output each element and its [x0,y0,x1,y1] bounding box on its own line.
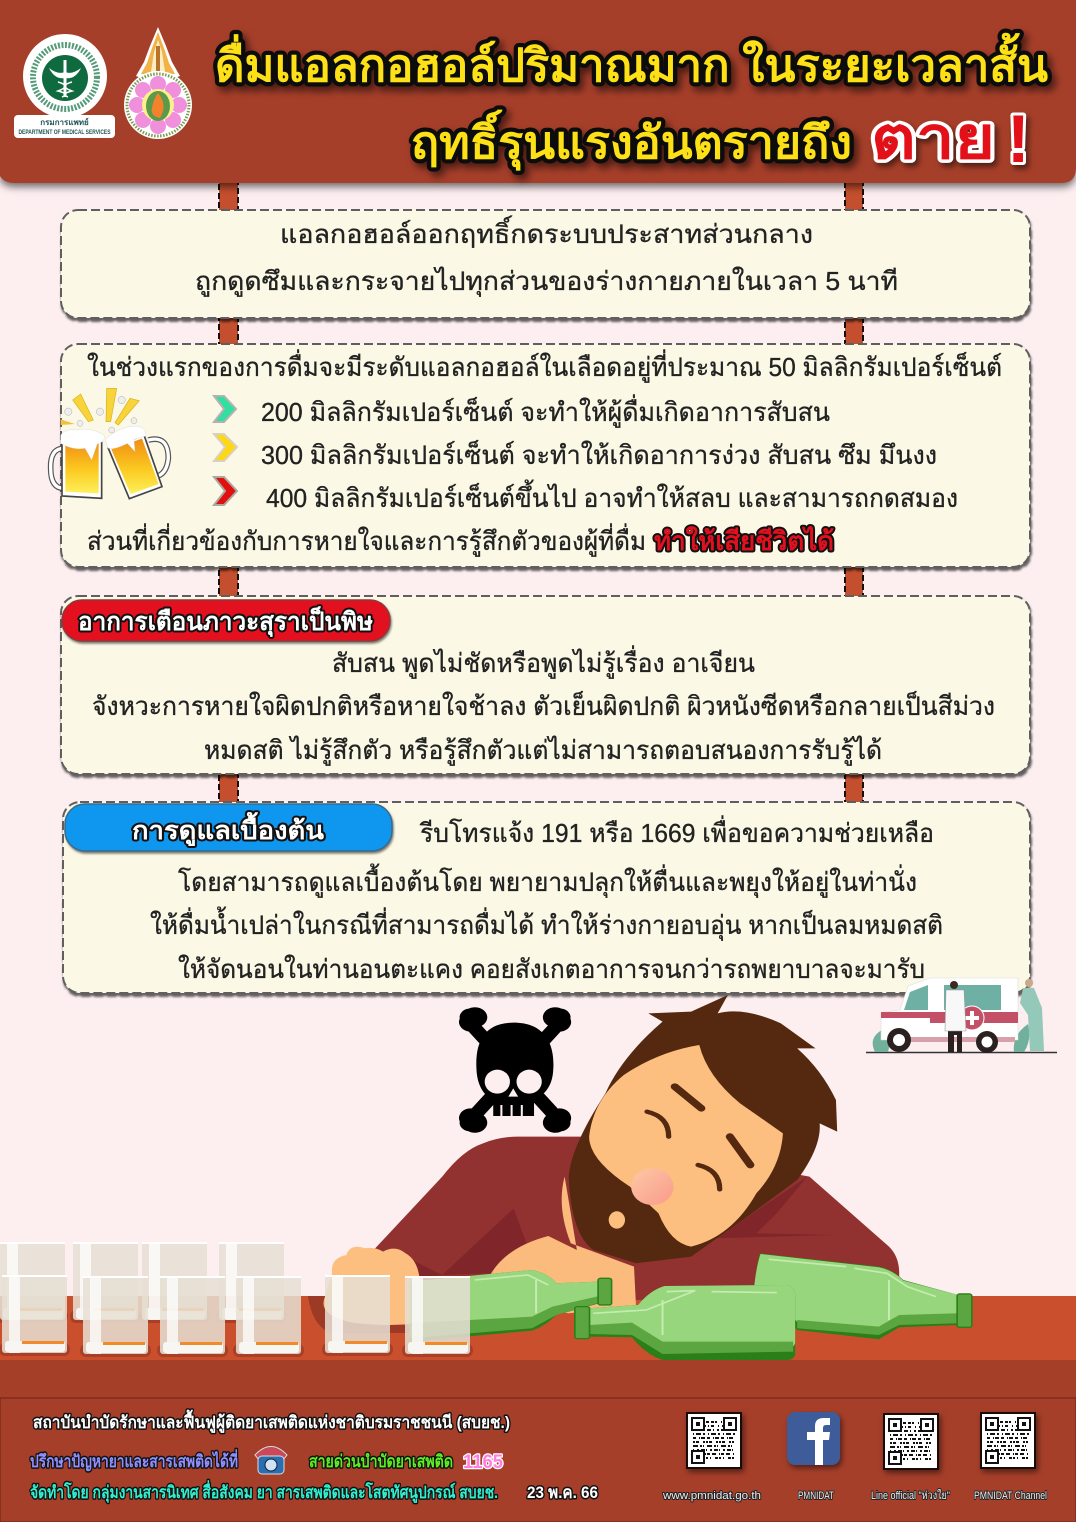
closed eyes [647,1112,720,1189]
panel box [61,596,1030,774]
QR code: website [687,1413,741,1468]
icon: beer mugs [51,388,168,499]
eyebrows [675,1087,750,1165]
connector posts [219,180,863,803]
chin dot [609,1211,625,1229]
icon: green arrow [214,396,236,422]
title line 1: ดื่มแอลกอฮอล์ปริมาณมาก ในระยะเวลาสั้น [215,32,1048,91]
hair and beard [569,995,837,1263]
bottle left [410,1270,612,1342]
Line label: Line official "ห่วงใย" [871,1489,950,1502]
header banner [0,0,1076,183]
title exclamation: ! [1007,101,1030,177]
badge: warning signs [62,600,390,641]
title danger word: ตาย [871,106,995,171]
text line: 300: 300 มิลลิกรัมเปอร์เซ็นต์ จะทำให้เกิดอาการง่วง สับสน ซึม มึนงง [261,439,937,470]
text line: ให้ดื่มน้ำเปล่าในกรณีที่สามารถดื่มได้ ทำให้ร่างกายอบอุ่น หากเป็นลมหมดสติ [150,906,943,941]
text line: รีบโทรแจ้ง 191 หรือ 1669 เพื่อขอความช่วยเหลือ [419,815,934,848]
logo: Ministry of Public Health: กรมการแพทย์ [40,117,89,127]
illustration: front row of glasses [0,1275,473,1357]
footer background [0,1398,1076,1522]
icon: telephone [255,1446,287,1474]
warning text: ทำให้เสียชีวิตได้ [654,525,834,556]
date: 23 พ.ค. 66 [527,1483,598,1502]
website label: www.pmnidat.go.th [662,1490,761,1502]
panel: first aid [63,802,1030,993]
illustration: back row of glasses [0,1242,287,1323]
text line: 400: 400 มิลลิกรัมเปอร์เซ็นต์ขึ้นไป อาจทำให้สลบ และสามารถกดสมอง [266,479,958,513]
text line: ส่วนที่เกี่ยวข้องกับการหายใจและการรู้สึกตัวของผู้ที่ดื่ม [87,523,646,557]
title line 2: ฤทธิ์รุนแรงอันตรายถึง [411,109,852,171]
icon: skull and crossbones [460,1008,570,1132]
nose [631,1168,674,1205]
bottle center [575,1285,795,1360]
text line: ให้จัดนอนในท่านอนตะแคง คอยสังเกตอาการจนกว่ารถพยาบาลจะมารับ [178,954,925,984]
panel box [61,344,1030,567]
Facebook label: PMNIDAT [798,1490,834,1502]
icon: ambulance with medics [866,978,1057,1053]
footer bar [0,1398,1076,1522]
text line: ถูกดูดซึมและกระจายไปทุกส่วนของร่างกายภายในเวลา 5 นาที [195,266,898,297]
logo: Ministry of Public Health: DEPARTMENT OF MEDICAL SERVICES [18,130,110,136]
QR code: channel [981,1413,1035,1468]
header background [0,0,1076,183]
hotline text: สายด่วนบำบัดยาเสพติด [309,1452,453,1471]
illustration: bottles [410,1253,972,1360]
text line: โดยสามารถดูแลเบื้องต้นโดย พยายามปลุกให้ตื่นและพยุงให้อยู่ในท่านั่ง [178,863,917,898]
logo: institute emblem [124,27,192,139]
panel box [63,802,1030,993]
badge: warning signs: อาการเตือนภาวะสุราเป็นพิษ [78,606,373,638]
man body [368,1137,899,1300]
text line: 200: 200 มิลลิกรัมเปอร์เซ็นต์ จะทำให้ผู้ดื่มเกิดอาการสับสน [261,394,830,428]
text line: หมดสติ ไม่รู้สึกตัว หรือรู้สึกตัวแต่ไม่สามารถตอบสนองการรับรู้ได้ [204,735,882,766]
hotline number: 1165 [463,1452,503,1473]
face [589,1045,783,1247]
hand [324,1247,420,1325]
panel: warning symptoms [61,596,1030,774]
panel: alcohol effect [61,210,1030,318]
channel label: PMNIDAT Channel [974,1490,1047,1502]
illustration: drunk man [324,995,899,1325]
logo: Ministry of Public Health [14,34,115,138]
badge: first aid [65,804,392,851]
icon: Facebook [787,1412,840,1465]
panel: blood alcohol levels [51,344,1030,567]
text line: แอลกอฮอล์ออกฤทธิ์กดระบบประสาทส่วนกลาง [280,215,813,249]
panel box [61,210,1030,318]
illustration: table [0,1296,1076,1398]
bottle right [754,1253,972,1339]
institute name: สถาบันบำบัดรักษาและฟื้นฟูผู้ติดยาเสพติดแห่งชาติบรมราชชนนี (สบยช.) [33,1409,510,1434]
text line: ในช่วงแรกของการดื่มจะมีระดับแอลกอฮอล์ในเลือดอยู่ที่ประมาณ 50 มิลลิกรัมเปอร์เซ็นต์ [87,349,1002,383]
QR code: Line [884,1414,938,1469]
icon: red arrow [214,477,237,505]
badge: first aid: การดูแลเบื้องต้น [132,811,324,847]
consult text: ปรึกษาปัญหายาและสารเสพติดได้ที่ [30,1449,238,1472]
icon: yellow arrow [214,434,237,461]
text line: สับสน พูดไม่ชัดหรือพูดไม่รู้เรื่อง อาเจียน [332,645,755,679]
arm and neck [479,1177,636,1313]
produced-by text: จัดทำโดย กลุ่มงานสารนิเทศ สื่อสังคม ยา สารเสพติดและโสตทัศนูปกรณ์ สบยช. [30,1480,498,1504]
text line: จังหวะการหายใจผิดปกติหรือหายใจช้าลง ตัวเย็นผิดปกติ ผิวหนังซีดหรือกลายเป็นสีม่วง [92,690,995,721]
